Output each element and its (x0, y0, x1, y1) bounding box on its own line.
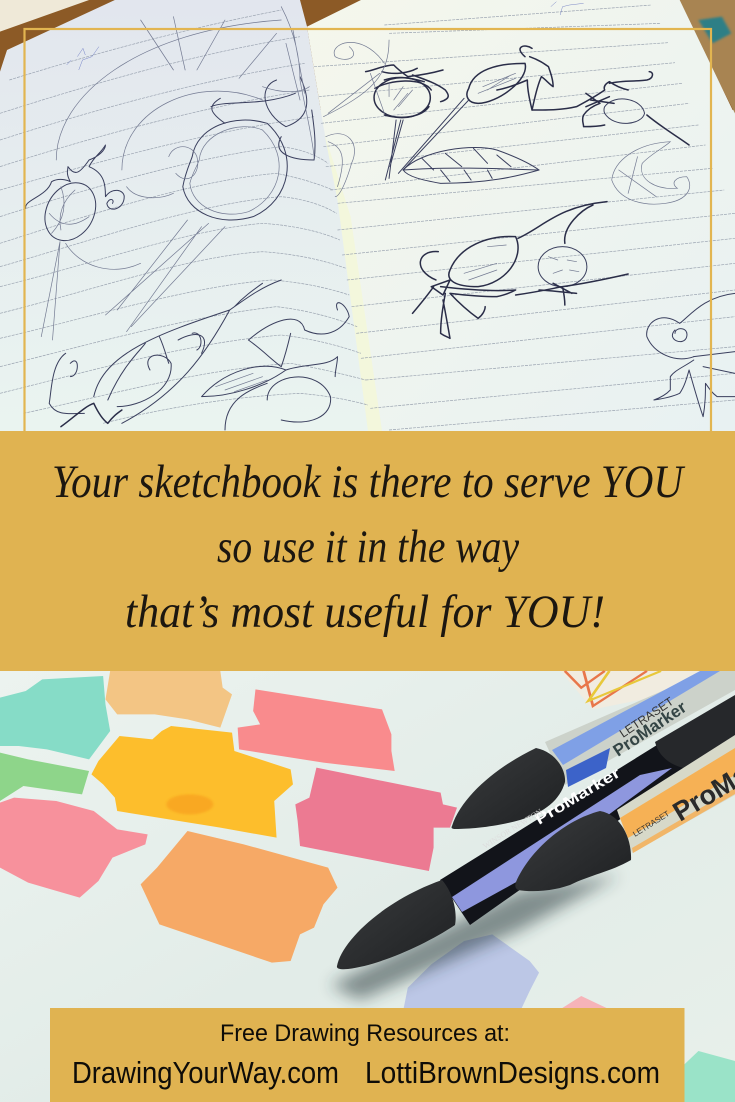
black rear end (655, 695, 735, 770)
website: DrawingYourWay: DrawingYourWay.com (72, 1055, 339, 1090)
ruled lines on left page (0, 10, 368, 423)
pen: orange Letraset ProMarker (515, 735, 735, 891)
swatch: green (0, 753, 89, 801)
swatch: pink bottom (560, 996, 609, 1009)
footer heading: Free Drawing Resources at: (220, 1020, 510, 1047)
sketch: flower sketch lower right (647, 293, 735, 417)
swatch: turquoise (0, 676, 110, 759)
sketches on right page (323, 40, 735, 417)
marker pens (330, 671, 735, 1000)
swatch: rose pink (295, 768, 457, 871)
website: LottiBrownDesigns: LottiBrownDesigns.com (365, 1055, 660, 1090)
label: Winsor Newton: WINSOR NEWTON (481, 807, 544, 851)
photo: marker swatches (0, 671, 735, 1102)
ruled lines on right page (314, 5, 735, 430)
swatch: yellow (91, 726, 293, 838)
swatch: pink left (0, 798, 148, 898)
orange pen cap (515, 811, 631, 891)
black barrel (440, 745, 690, 925)
pen: Winsor Newton ProMarker (337, 695, 735, 969)
sketch: leaf (403, 147, 539, 183)
swatch: coral pink (238, 689, 395, 771)
heading band (0, 431, 735, 671)
pen shadows (330, 875, 620, 1000)
sketch: rosehip with curling sepals (202, 303, 349, 430)
swatch: orange (141, 831, 338, 963)
label: ProMarker blue pen: ProMarker (610, 697, 690, 760)
sketch: large rosehip outline (56, 7, 315, 332)
cream gutter band (324, 133, 382, 431)
sketch: side view rosehip bud (398, 46, 553, 173)
photo: open sketchbook with rosehip drawings (0, 0, 735, 431)
black pen cap (337, 880, 456, 969)
label: Letraset orange pen: LETRASET (631, 809, 671, 839)
sketches on left page (26, 7, 349, 430)
sketch: left edge sepal on right page (326, 134, 355, 197)
pen: blue Letraset ProMarker (452, 671, 735, 829)
sketch: small rosehip left (26, 145, 141, 340)
patterned paper corner (560, 671, 735, 709)
heading text: so use it in the way (217, 521, 519, 573)
right notebook page (307, 0, 735, 431)
heading text: that’s most useful for YOU! (125, 586, 605, 638)
sketch: third rosehip (532, 72, 689, 145)
handwritten dates (67, 2, 584, 70)
sketch: curled leaf outline right (612, 142, 690, 204)
left notebook page (0, 0, 370, 431)
label: Letraset blue pen: LETRASET (617, 694, 677, 740)
label: ProMarker on black pen: ProMarker (532, 764, 624, 828)
pen lettering (481, 694, 735, 851)
sketch: bud bottom left (49, 280, 281, 427)
blue pen cap (452, 748, 565, 829)
sketch: pair of rosehips on stem (412, 202, 628, 338)
wooden table behind book (0, 0, 735, 113)
swatch: lavender (403, 934, 539, 1011)
heading text (52, 456, 686, 638)
footer band (50, 1008, 684, 1102)
sketch: round rosehip with stem (323, 40, 448, 180)
swatch: peach (105, 671, 232, 728)
swatch: mint bottom right (684, 1051, 735, 1102)
lavender band (452, 768, 672, 912)
